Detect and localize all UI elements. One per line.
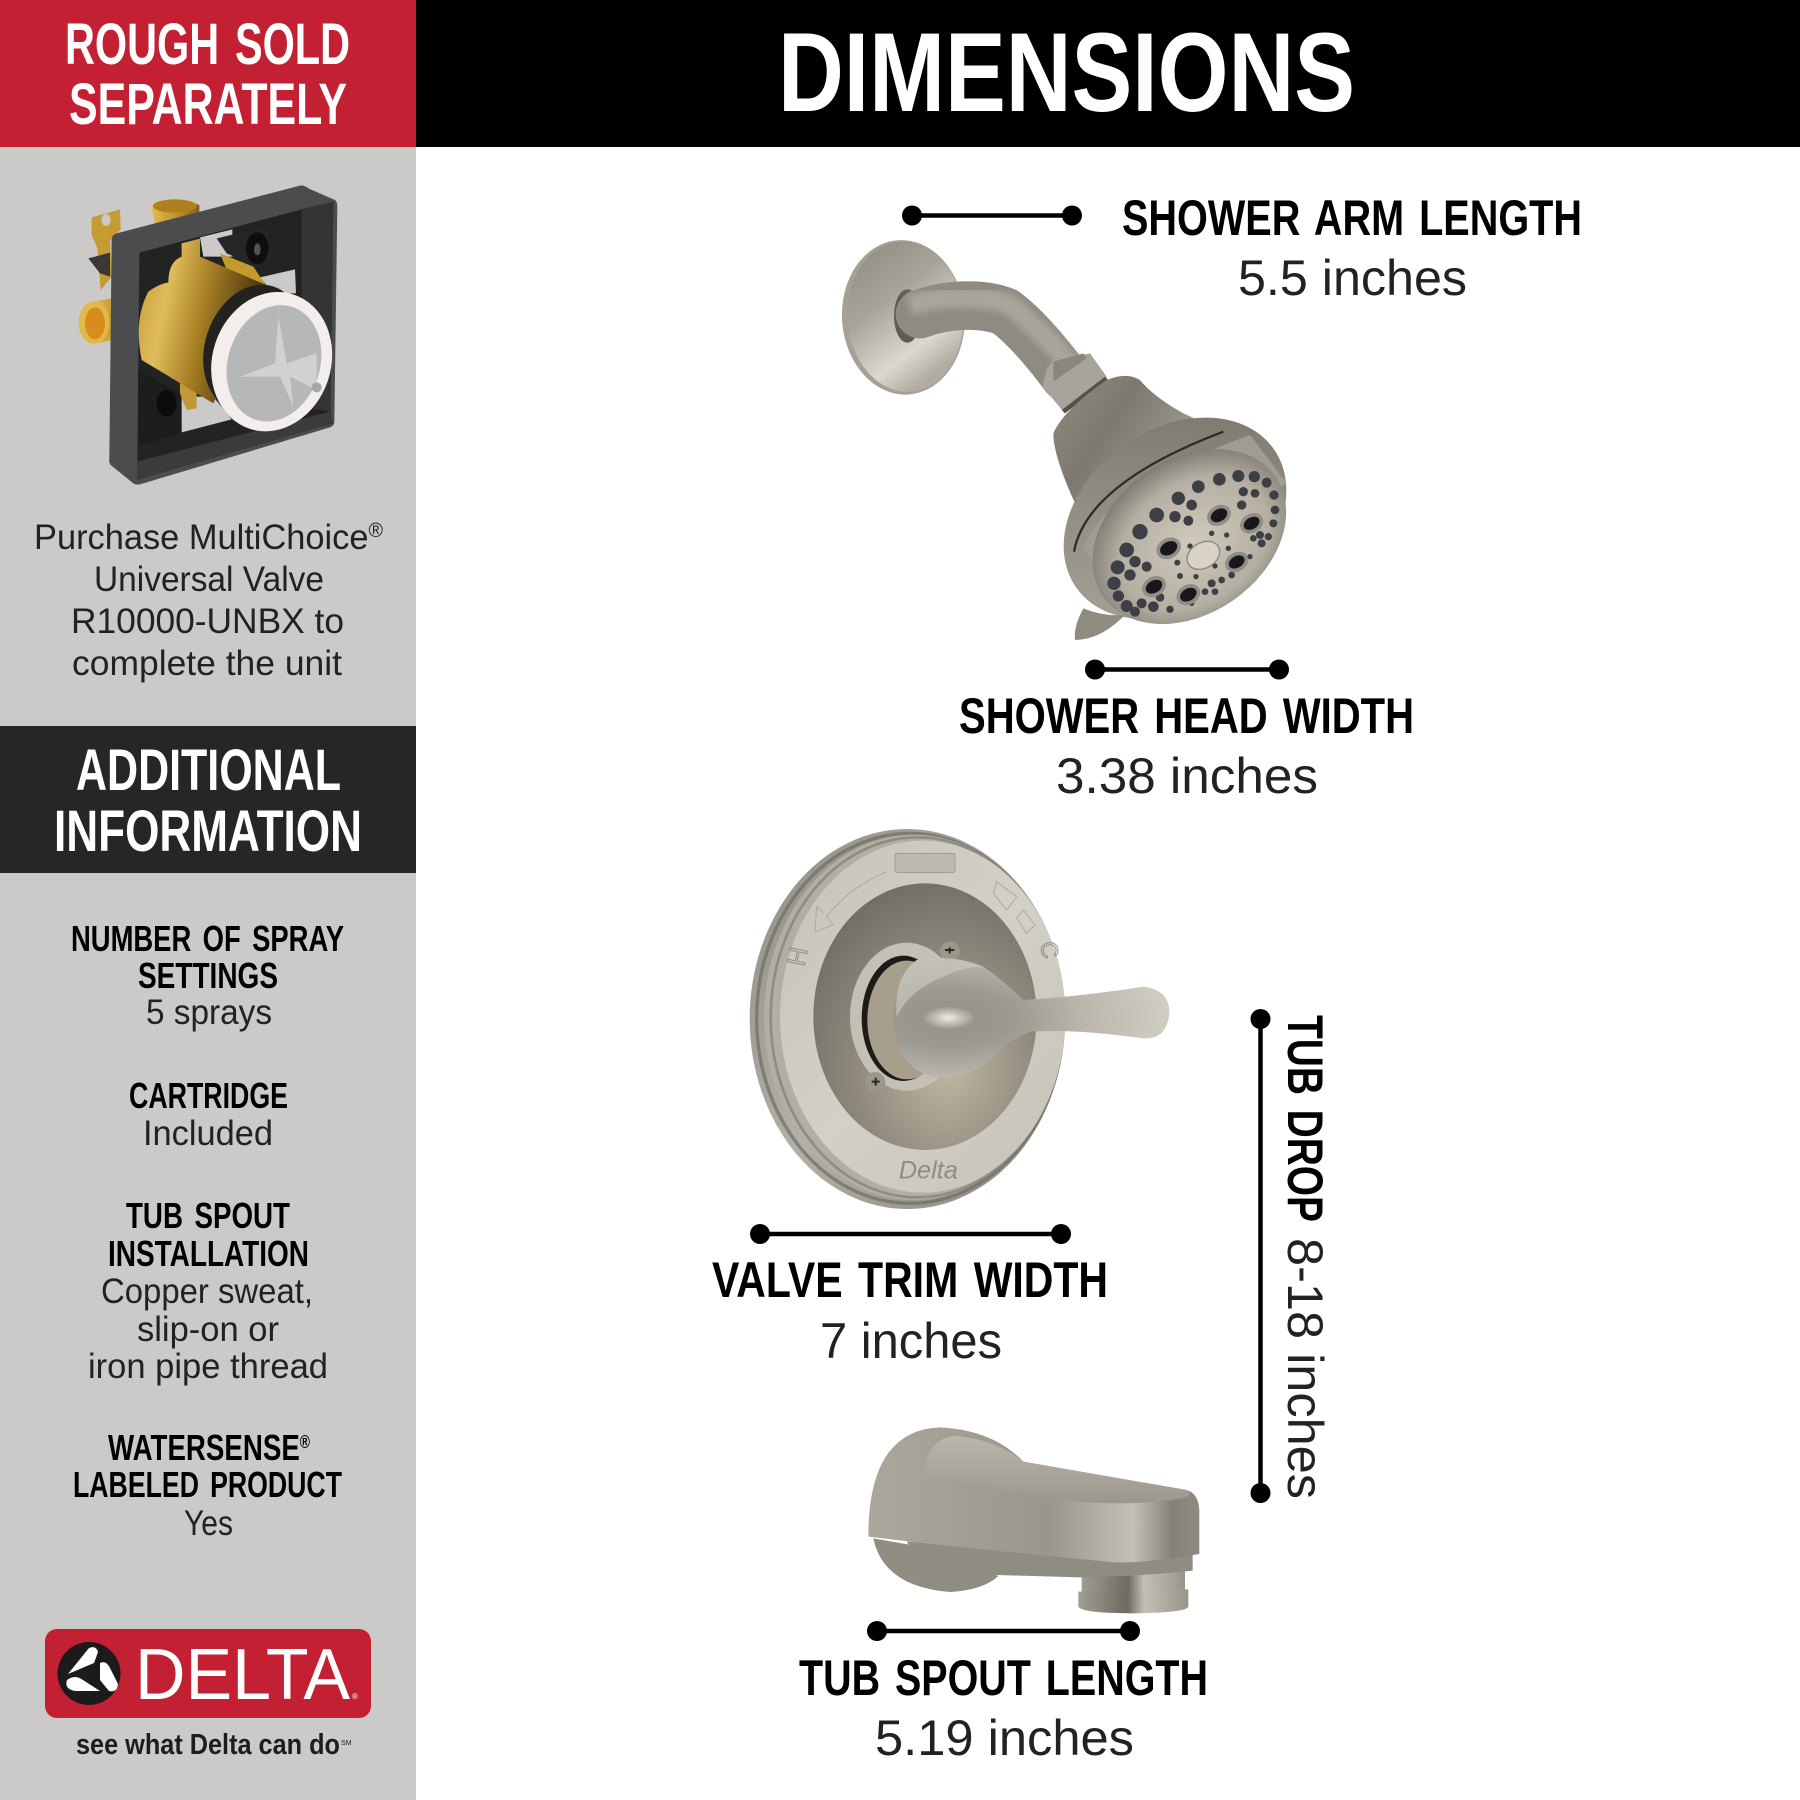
heading: additional information: INFORMATION [54,799,362,864]
logo: delta: ® [352,1692,358,1701]
dimension line: shower arm [902,206,1082,226]
info: watersense: WATERSENSE [108,1427,357,1468]
label: tub spout length: TUB SPOUT LENGTH [799,1650,1208,1706]
label: valve trim width: VALVE TRIM WIDTH [712,1252,1108,1308]
panel: left sidebar [0,0,416,1800]
info: watersense: LABELED PRODUCT [73,1464,342,1505]
logo: delta: DELTA [135,1635,350,1715]
image: valve trim with lever: C [1035,939,1064,961]
label: shower arm length: SHOWER ARM LENGTH [1122,190,1582,246]
label: shower head width: SHOWER HEAD WIDTH [959,688,1414,744]
image: shower head and arm [837,236,1325,661]
banner: rough sold separately: SEPARATELY [69,72,347,137]
image: tub spout [868,1427,1199,1613]
label: valve trim width: 7 inches [820,1313,1002,1369]
label: shower arm length: 5.5 inches [1238,250,1467,306]
info: cartridge: Included [143,1114,273,1153]
dimension line: valve trim [750,1224,1071,1244]
text: purchase note: Universal Valve [94,560,324,599]
label: tub spout length [799,1650,1208,1766]
info: tub spout installation [88,1195,328,1386]
text: purchase note: Purchase MultiChoice [34,518,374,557]
info: watersense [73,1427,342,1543]
image: valve trim with lever [750,829,1169,1209]
heading: additional information: ADDITIONAL [76,738,341,803]
dimension line: tub spout [867,1621,1140,1641]
image: rough-in valve [79,186,350,485]
logo: delta: SM [341,1740,352,1747]
info: tub spout installation: TUB SPOUT [126,1195,290,1236]
label: shower head width [959,688,1414,804]
info: tub spout installation: INSTALLATION [108,1233,309,1274]
dimension line: tub drop [1250,1009,1270,1503]
info: cartridge [129,1075,288,1153]
info: tub spout installation: Copper sweat, [101,1272,313,1311]
label: tub drop: 8-18 inches [1277,1238,1333,1499]
text: purchase note: ® [369,520,383,542]
logo: delta [45,1629,371,1761]
info: tub spout installation: slip-on or [137,1310,279,1349]
dimension line: shower head [1085,660,1289,680]
info: spray settings: 5 sprays [146,993,272,1032]
label: tub drop: TUB DROP [1277,1015,1333,1222]
banner: rough sold separately [0,0,416,147]
info: spray settings [71,918,344,1032]
label: valve trim width [712,1252,1108,1369]
title: dimensions [416,0,1800,147]
text: purchase note: R10000-UNBX to [71,602,344,641]
image: valve trim with lever: Delta [899,1156,958,1184]
text: purchase note [34,518,383,683]
label: tub spout length: 5.19 inches [875,1710,1134,1766]
title: dimensions: DIMENSIONS [778,10,1355,135]
info: watersense: ® [300,1432,310,1452]
heading: additional information [0,726,416,873]
label: tub drop [1277,1015,1333,1499]
label: shower head width: 3.38 inches [1056,748,1318,804]
info: spray settings: SETTINGS [138,955,278,996]
image: valve trim with lever: H [783,945,814,969]
info: cartridge: CARTRIDGE [129,1075,288,1116]
logo: delta: see what Delta can do [76,1729,340,1761]
label: shower arm length [1122,190,1582,306]
info: spray settings: NUMBER OF SPRAY [71,918,344,959]
banner: rough sold separately: ROUGH SOLD [65,12,350,77]
text: purchase note: complete the unit [72,644,342,683]
info: tub spout installation: iron pipe thread [88,1347,328,1386]
info: watersense: Yes [184,1504,233,1543]
